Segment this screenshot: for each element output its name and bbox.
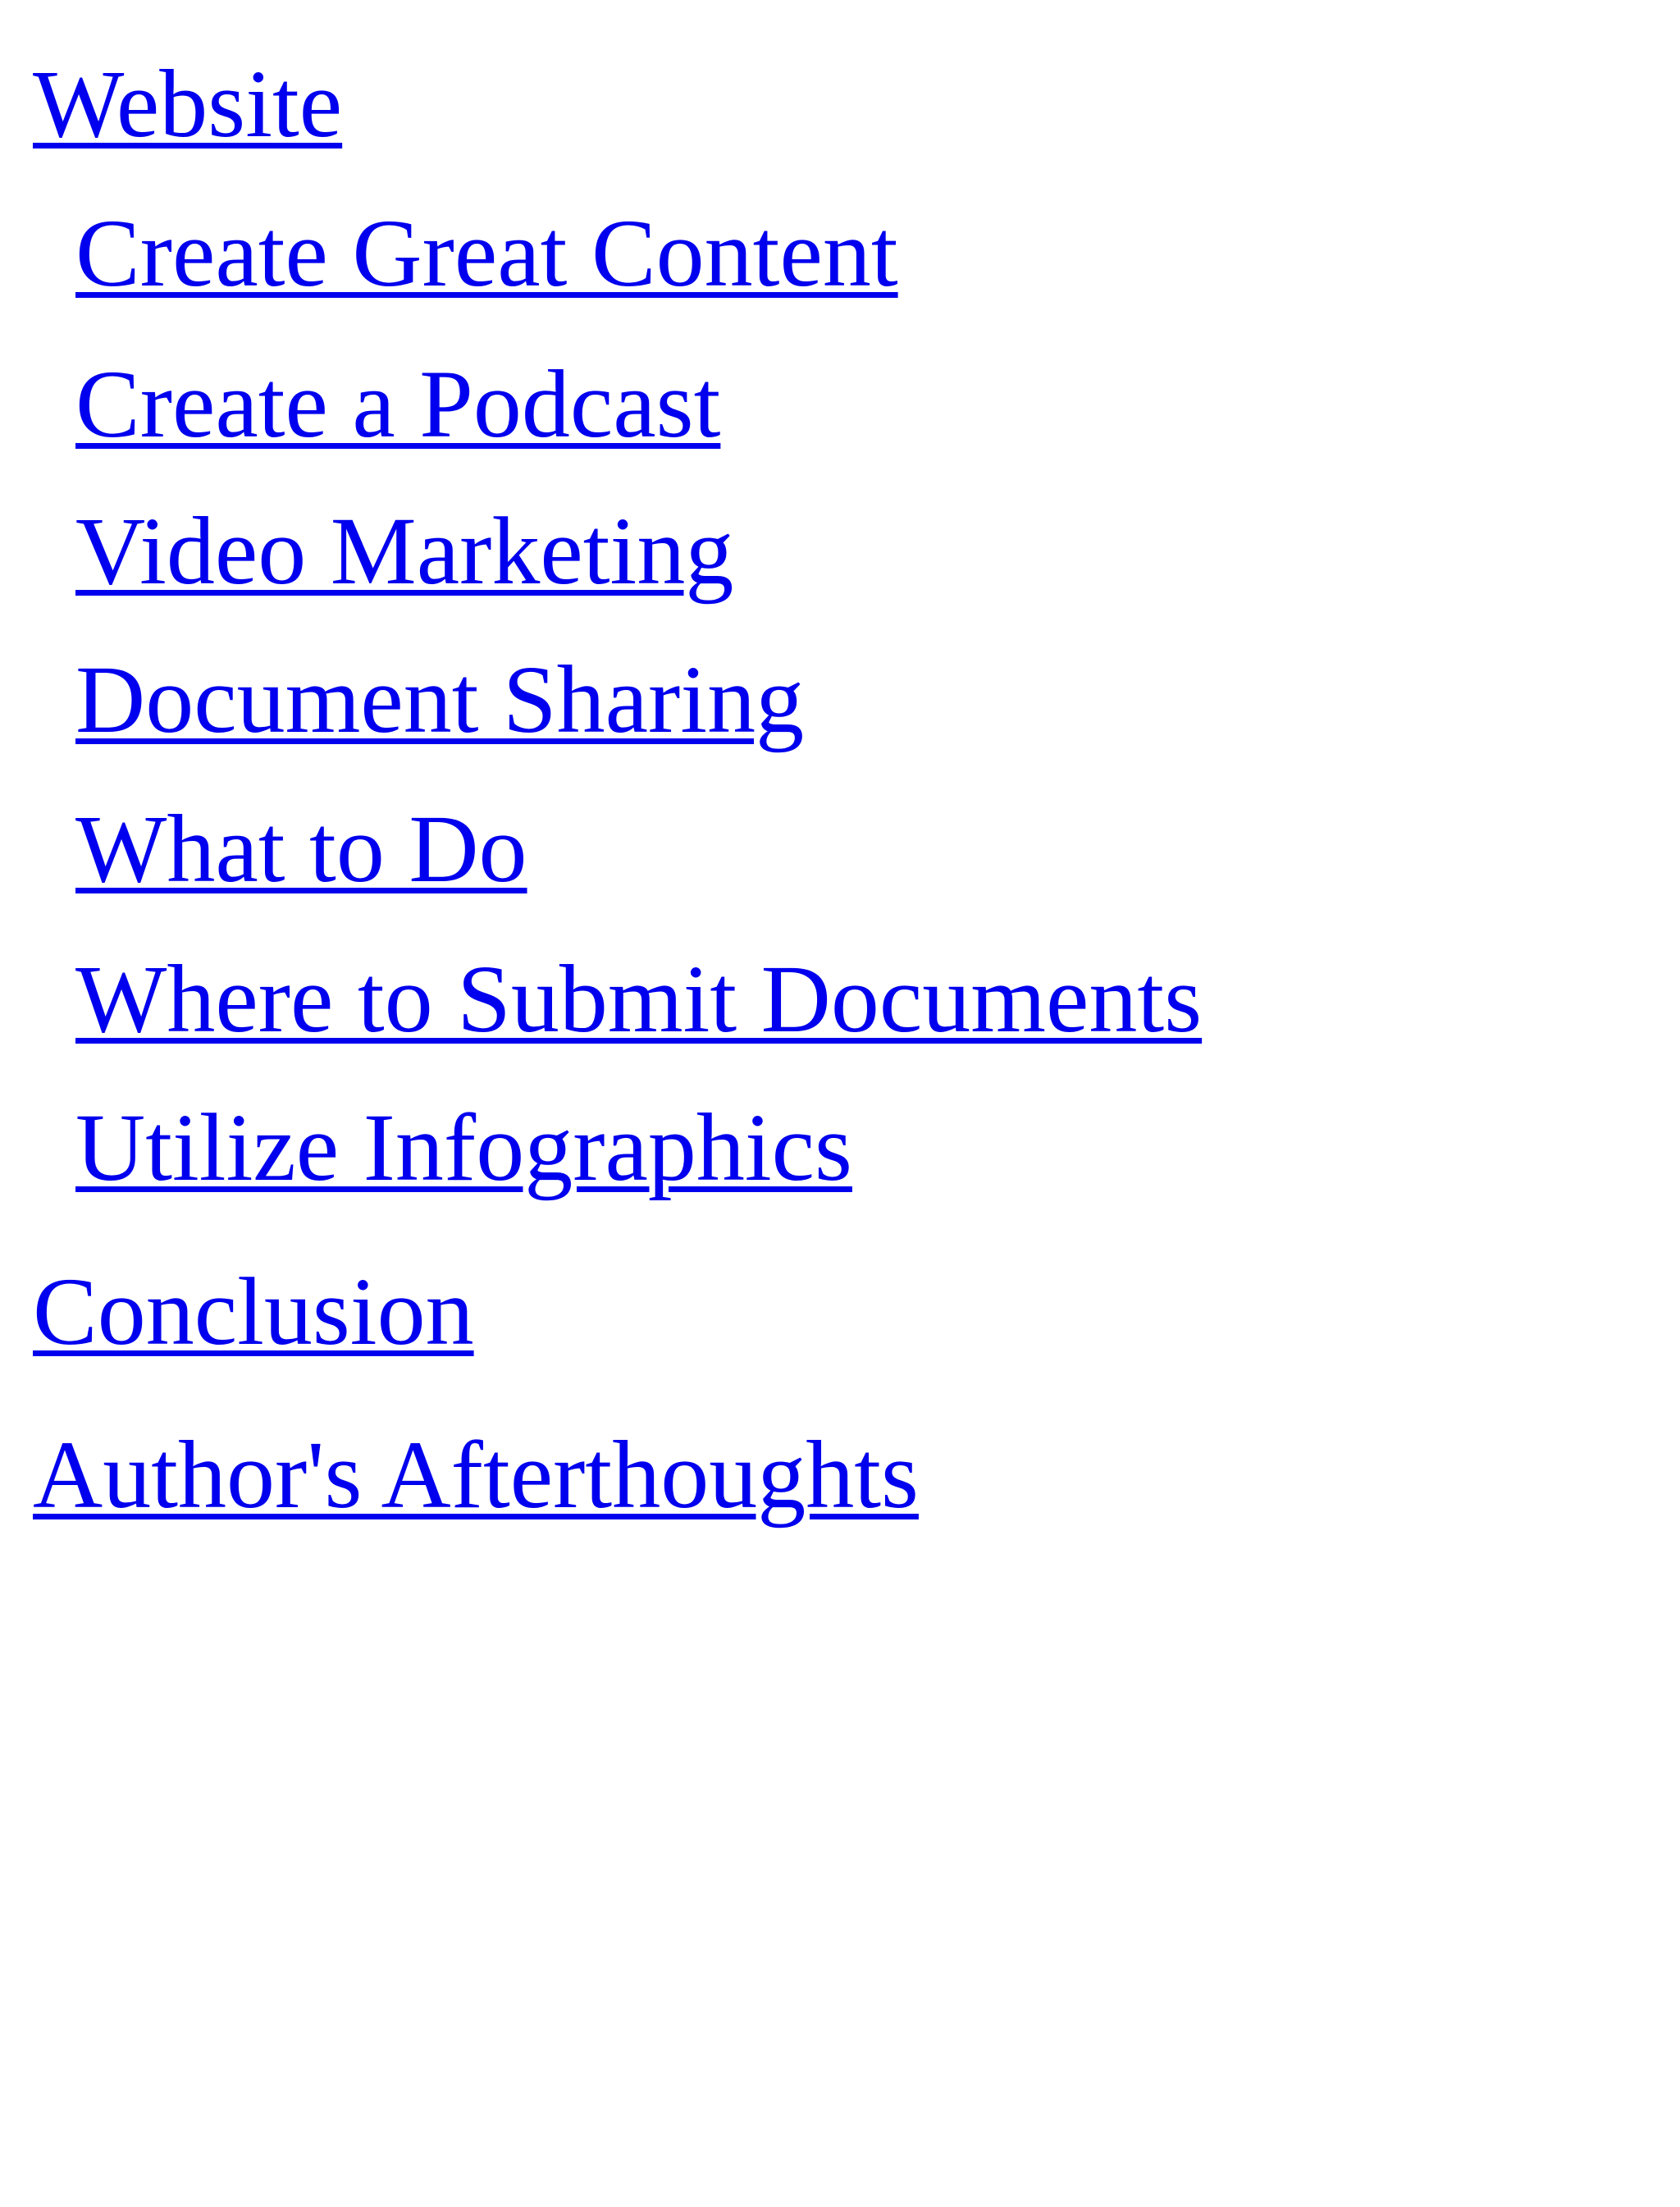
link: Video Marketing: Video Marketing bbox=[75, 497, 733, 605]
link: What to Do: What to Do bbox=[75, 795, 527, 902]
link: Conclusion: Conclusion bbox=[33, 1258, 474, 1365]
link: Author's Afterthoughts: Author's Afterthoughts bbox=[33, 1421, 919, 1528]
link: Document Sharing: Document Sharing bbox=[75, 646, 804, 753]
link: Website: Website bbox=[33, 50, 342, 158]
link: Create a Podcast: Create a Podcast bbox=[75, 350, 720, 458]
link: Utilize Infographics: Utilize Infographics bbox=[75, 1094, 852, 1201]
link: Where to Submit Documents: Where to Submit Documents bbox=[75, 945, 1202, 1053]
link: Create Great Content: Create Great Content bbox=[75, 199, 898, 307]
